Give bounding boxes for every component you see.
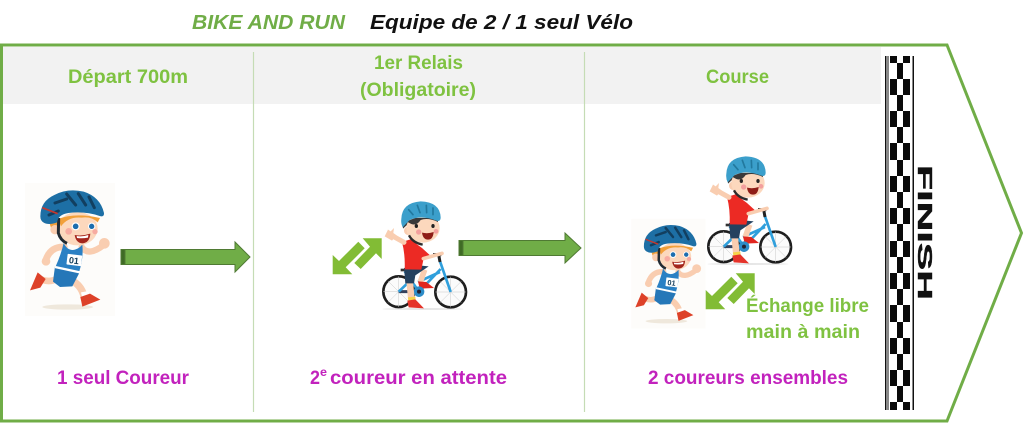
title: Equipe de 2 / 1 seul Vélo: [370, 12, 633, 34]
arrow: départ to relais: [121, 242, 250, 272]
heading: relais: (Obligatoire): [360, 80, 476, 101]
title: [192, 12, 633, 34]
callout: free exchange: [746, 295, 869, 343]
callout: free exchange: main à main: [746, 322, 860, 343]
callout: free exchange: Échange libre: [746, 295, 869, 317]
caption: waiting runner: 2: [310, 368, 320, 389]
finish label: FINISH: [913, 165, 935, 300]
header band: [3, 47, 881, 104]
cyclist illustration: [382, 201, 466, 310]
caption: 1 runner: 1 seul Coureur: [57, 368, 190, 389]
icon: exchange arrows course: [706, 273, 755, 309]
cyclist illustration: course: [707, 156, 791, 265]
heading: départ: Départ 700m: [68, 67, 188, 88]
finish line checker: [885, 56, 914, 410]
heading: relais: [360, 53, 476, 101]
title: BIKE AND RUN: [192, 12, 346, 34]
caption: waiting runner: coureur en attente: [330, 368, 507, 389]
heading: relais: 1er Relais: [374, 53, 463, 74]
heading: course: Course: [706, 67, 769, 88]
caption: 2 runners: 2 coureurs ensembles: [648, 368, 848, 389]
runner illustration: course: [631, 219, 705, 329]
caption: waiting runner: e: [320, 365, 327, 379]
arrow: relais to course: [459, 233, 581, 263]
icon: exchange arrows relais: [333, 238, 382, 274]
runner illustration: [25, 183, 115, 316]
